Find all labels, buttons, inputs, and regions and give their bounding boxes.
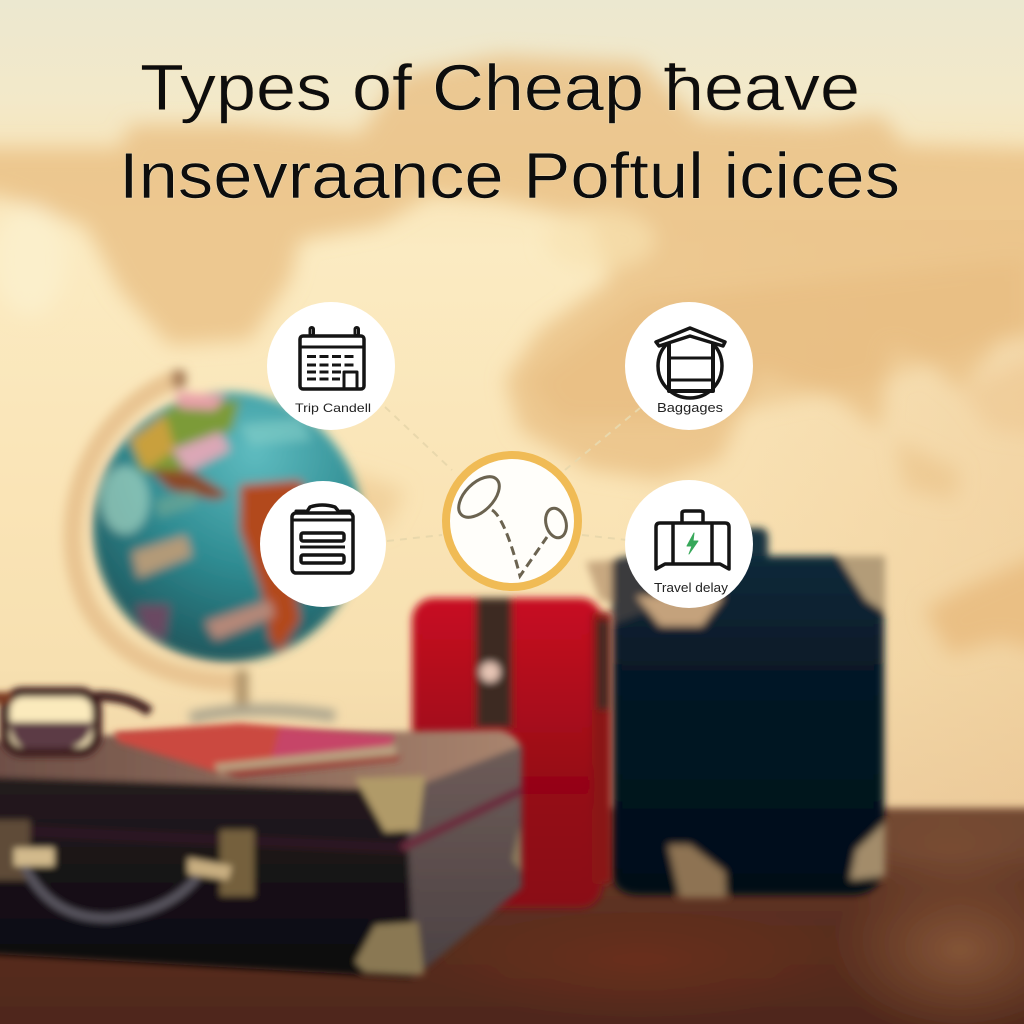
dashed connectors — [385, 407, 640, 541]
icon: baggage — [656, 328, 725, 398]
globe stand arc — [73, 378, 240, 682]
icon: route markers — [451, 469, 570, 576]
wall right tint — [0, 220, 1024, 830]
world map backdrop — [0, 55, 1024, 660]
node: Travel delay — [625, 480, 753, 608]
navy suitcase — [586, 528, 885, 898]
icon: calendar — [300, 328, 364, 389]
suitcase brass corners — [355, 776, 425, 832]
node: unlabeled documents — [260, 481, 386, 607]
red suitcase — [412, 598, 612, 908]
label: Baggages: Baggages — [657, 401, 723, 415]
suitcase top face — [0, 730, 522, 792]
icon: document case — [292, 505, 353, 573]
red passport book — [114, 723, 400, 776]
label: Travel delay: Travel delay — [654, 581, 729, 595]
globe continents — [101, 466, 149, 534]
node: Baggages — [625, 302, 753, 430]
floor — [0, 808, 1024, 1024]
brown suitcase — [0, 730, 522, 978]
suitcase side face — [406, 745, 522, 978]
label: Trip Candell: Trip Candell — [295, 401, 371, 415]
floor light patches — [410, 810, 1024, 1024]
title — [119, 51, 900, 212]
suitcase clasps and handle — [0, 820, 30, 880]
icon: green bolt — [687, 533, 698, 554]
icon: suitcase with bolt — [656, 511, 729, 569]
suitcase front face — [0, 776, 412, 978]
globe sphere — [93, 392, 363, 662]
globe with stand — [73, 370, 363, 718]
title: Types of Cheap ħeave — [140, 51, 860, 124]
node: Trip Candell — [267, 302, 395, 430]
title: Insevraance Poftul icices — [119, 139, 900, 212]
sunglasses — [0, 692, 150, 752]
central route circle — [446, 455, 578, 587]
